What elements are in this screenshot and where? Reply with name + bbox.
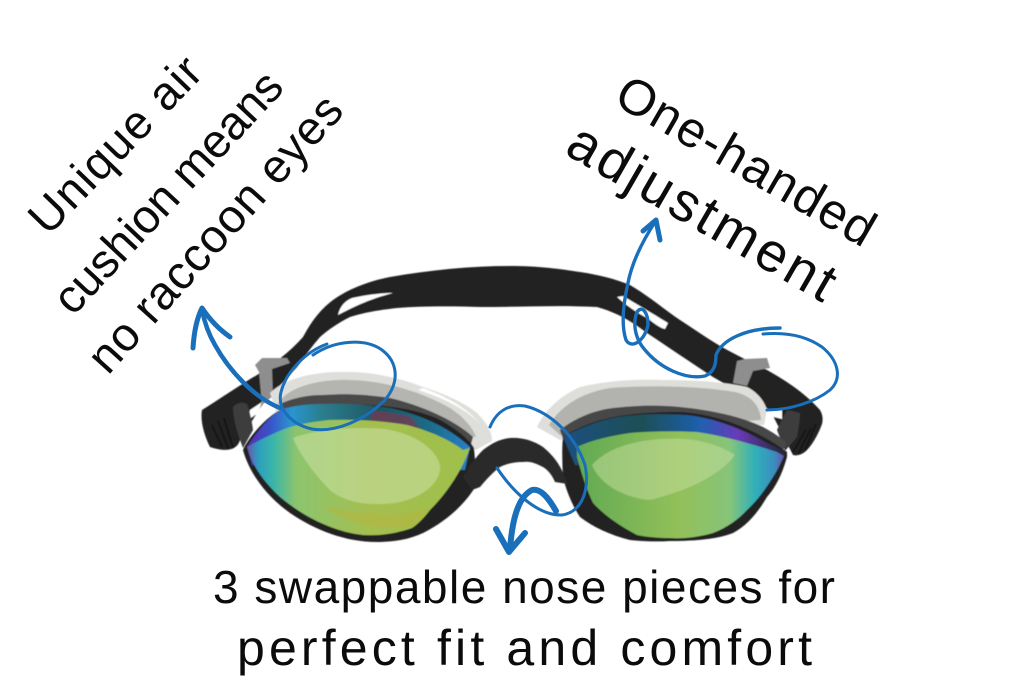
- air cushion text: cushion means: [42, 59, 293, 324]
- callout: one-handed adjustment: [557, 64, 886, 410]
- lens left highlight: [293, 428, 440, 504]
- air cushion text: no raccoon eyes: [76, 83, 353, 383]
- mirror band right: [563, 414, 787, 465]
- lens left lower tint: [320, 505, 430, 528]
- head strap: [201, 266, 823, 455]
- callout: air cushion: [17, 45, 395, 430]
- mirror band left: [247, 404, 470, 470]
- adjustment text: adjustment: [557, 110, 848, 313]
- air cushion text: Unique air: [17, 45, 212, 244]
- frame right: [562, 412, 787, 541]
- loop and arrow: adjustment: [623, 220, 837, 410]
- nose pieces text: perfect fit and comfort: [237, 620, 812, 676]
- lens right highlight: [592, 439, 735, 500]
- strap buckles: [255, 358, 290, 405]
- nose loop and arrow: [490, 406, 586, 552]
- frame left: [243, 404, 477, 542]
- lens left: [247, 420, 470, 535]
- gasket left: [270, 372, 492, 450]
- goggles: [201, 266, 823, 542]
- adjustment text: One-handed: [606, 64, 886, 258]
- lens right: [577, 431, 784, 538]
- callout: nose pieces: [213, 406, 835, 676]
- strap slots: [338, 293, 393, 315]
- nose pieces text: 3 swappable nose pieces for: [213, 561, 835, 613]
- circle and arrow: air cushion: [193, 308, 395, 430]
- gasket right: [537, 380, 767, 440]
- nose bridge: [463, 438, 568, 490]
- nose pieces text: [213, 561, 835, 676]
- strap ribs: [212, 418, 816, 453]
